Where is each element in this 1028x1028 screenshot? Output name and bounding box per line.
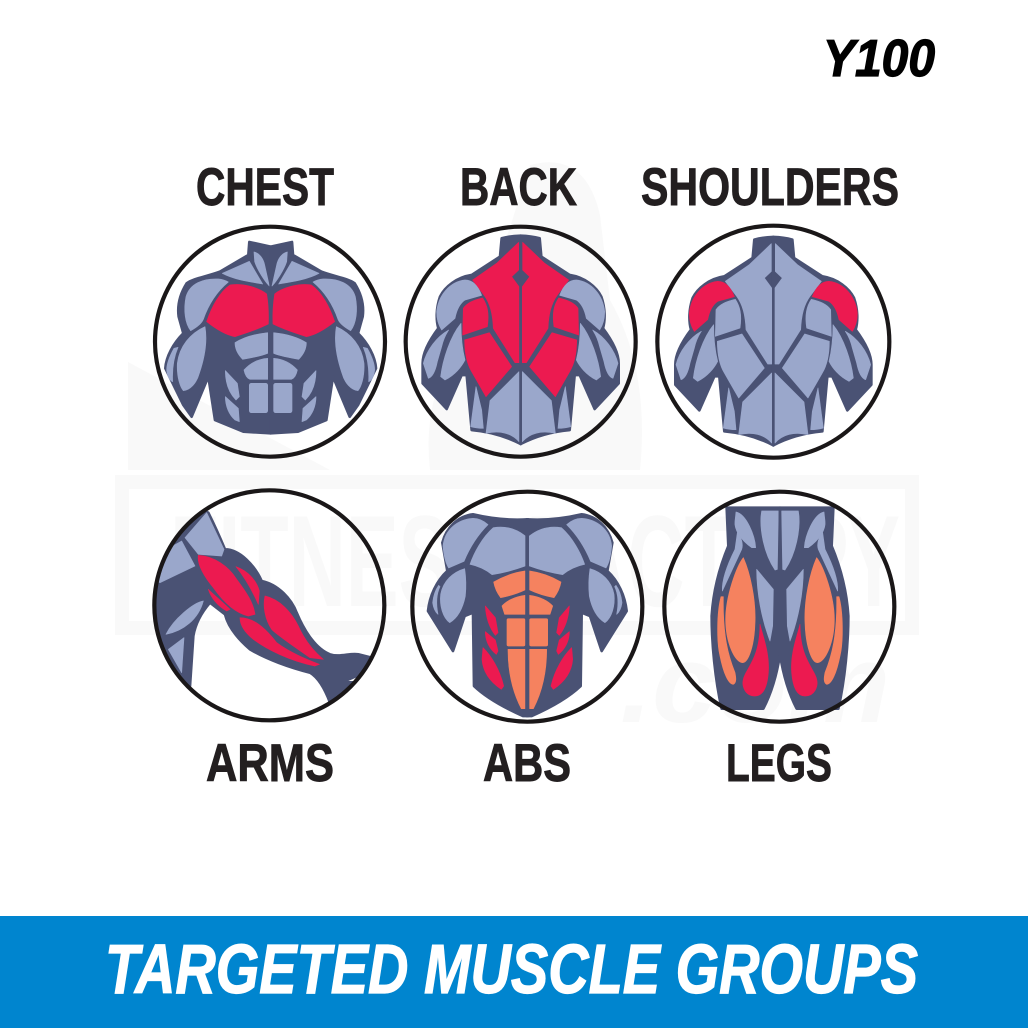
watermark — [122, 162, 912, 746]
heading: abs: ABS — [483, 734, 571, 793]
model code: Y100 — [823, 30, 935, 88]
panel: shoulders — [657, 226, 889, 458]
panel: chest — [155, 227, 385, 457]
panel: arms — [153, 490, 384, 720]
heading: chest: CHEST — [196, 158, 334, 217]
watermark: .com — [620, 623, 890, 746]
panel: legs — [664, 492, 894, 722]
heading: legs: LEGS — [726, 734, 832, 793]
panel: abs — [412, 492, 642, 722]
heading: arms: ARMS — [206, 734, 334, 793]
heading: shoulders: SHOULDERS — [641, 158, 899, 217]
heading: back: BACK — [460, 158, 577, 217]
panel: back — [406, 227, 636, 457]
banner background — [0, 916, 1028, 1028]
